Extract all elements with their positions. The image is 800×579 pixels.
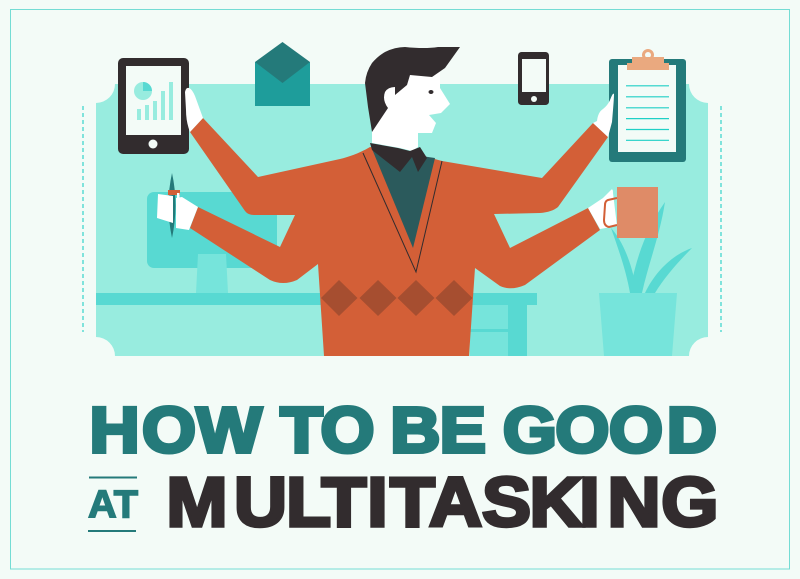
right hand holding clipboard bbox=[593, 94, 614, 137]
coffee mug in right hand bbox=[588, 187, 658, 238]
title: multitasking: MULTITASKING bbox=[166, 464, 718, 542]
icon: smartphone bbox=[518, 52, 549, 105]
hair bbox=[365, 47, 460, 132]
icon: tablet with charts bbox=[118, 58, 189, 154]
potted plant bbox=[599, 202, 692, 356]
eye bbox=[428, 90, 434, 94]
title: how to be good: HOW TO BE GOOD bbox=[90, 395, 717, 466]
desktop monitor bbox=[147, 192, 277, 293]
icon: envelope bbox=[255, 42, 310, 106]
panel: teal ticket background bbox=[96, 84, 708, 356]
left hand holding pen bbox=[157, 190, 198, 230]
shirt bbox=[372, 149, 435, 248]
cardigan neckline bbox=[363, 153, 442, 272]
sweater diamonds bbox=[321, 280, 472, 316]
icon: clipboard bbox=[609, 50, 686, 162]
title: at: AT bbox=[88, 484, 138, 526]
pen bbox=[168, 173, 176, 238]
face bbox=[372, 72, 450, 151]
left hand holding tablet bbox=[185, 88, 203, 132]
shirt collar bbox=[370, 143, 427, 172]
sweater with arms bbox=[190, 118, 608, 356]
desk bbox=[96, 293, 537, 356]
